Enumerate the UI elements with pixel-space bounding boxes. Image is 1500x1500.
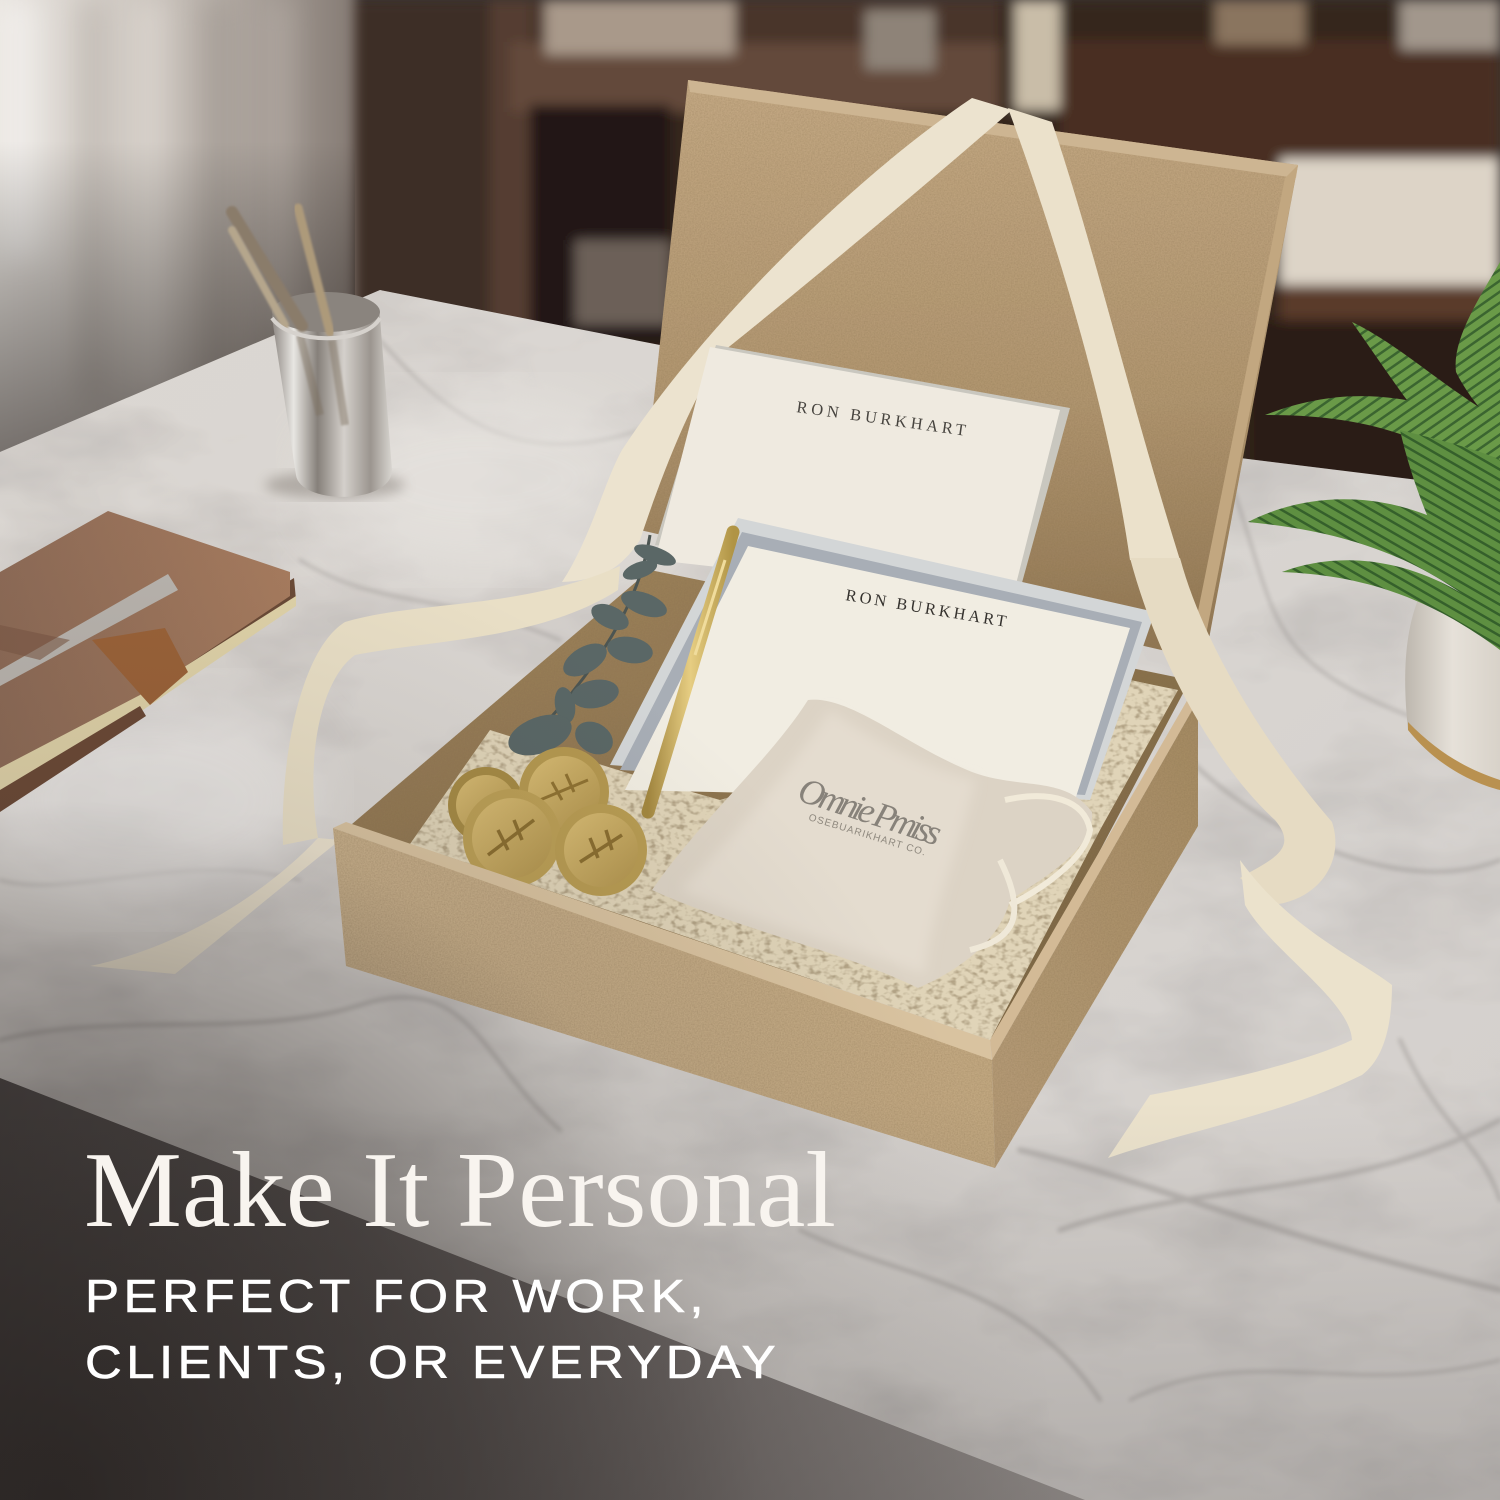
- pouch small print: OSEBUARIKHART CO.: [807, 812, 928, 859]
- linen pouch: [652, 700, 1092, 988]
- gold wax seals: [448, 747, 647, 896]
- gold pen: [648, 532, 733, 812]
- shredded paper filling: [410, 680, 1178, 1040]
- subheading line 2: CLIENTS, OR EVERYDAY: [85, 1336, 780, 1388]
- background: sheer window curtain: [0, 0, 355, 470]
- ribbon: left strand over the table: [90, 566, 620, 974]
- subheading line 1: PERFECT FOR WORK,: [85, 1270, 708, 1322]
- lower edge shading: [0, 1100, 1500, 1500]
- floor below the table: [0, 1060, 1200, 1500]
- pen cup with pens: [232, 208, 405, 499]
- potted fern: [1248, 262, 1500, 790]
- back note card: [655, 345, 1070, 600]
- ribbon: strand behind cards: [562, 98, 1180, 582]
- front note card set in clear case: [610, 518, 1155, 800]
- back card name: RON BURKHART: [795, 397, 968, 440]
- background: dark wood shelving: [0, 0, 1500, 500]
- gift box front wall: [333, 822, 995, 1168]
- eucalyptus sprig: [503, 535, 678, 763]
- headline: Make It Personal: [84, 1131, 836, 1250]
- ribbon: right strand over box to table: [1108, 558, 1392, 1158]
- subheading: [85, 1270, 780, 1388]
- gift box right wall: [990, 692, 1198, 1168]
- front card name: RON BURKHART: [844, 585, 1009, 631]
- box interior: [345, 570, 1190, 1040]
- marble veins: [0, 340, 1500, 1400]
- leather notebook with pen: [0, 511, 296, 812]
- pouch monogram: Omnie Pmiss: [794, 770, 947, 853]
- gift box lid: [640, 80, 1298, 660]
